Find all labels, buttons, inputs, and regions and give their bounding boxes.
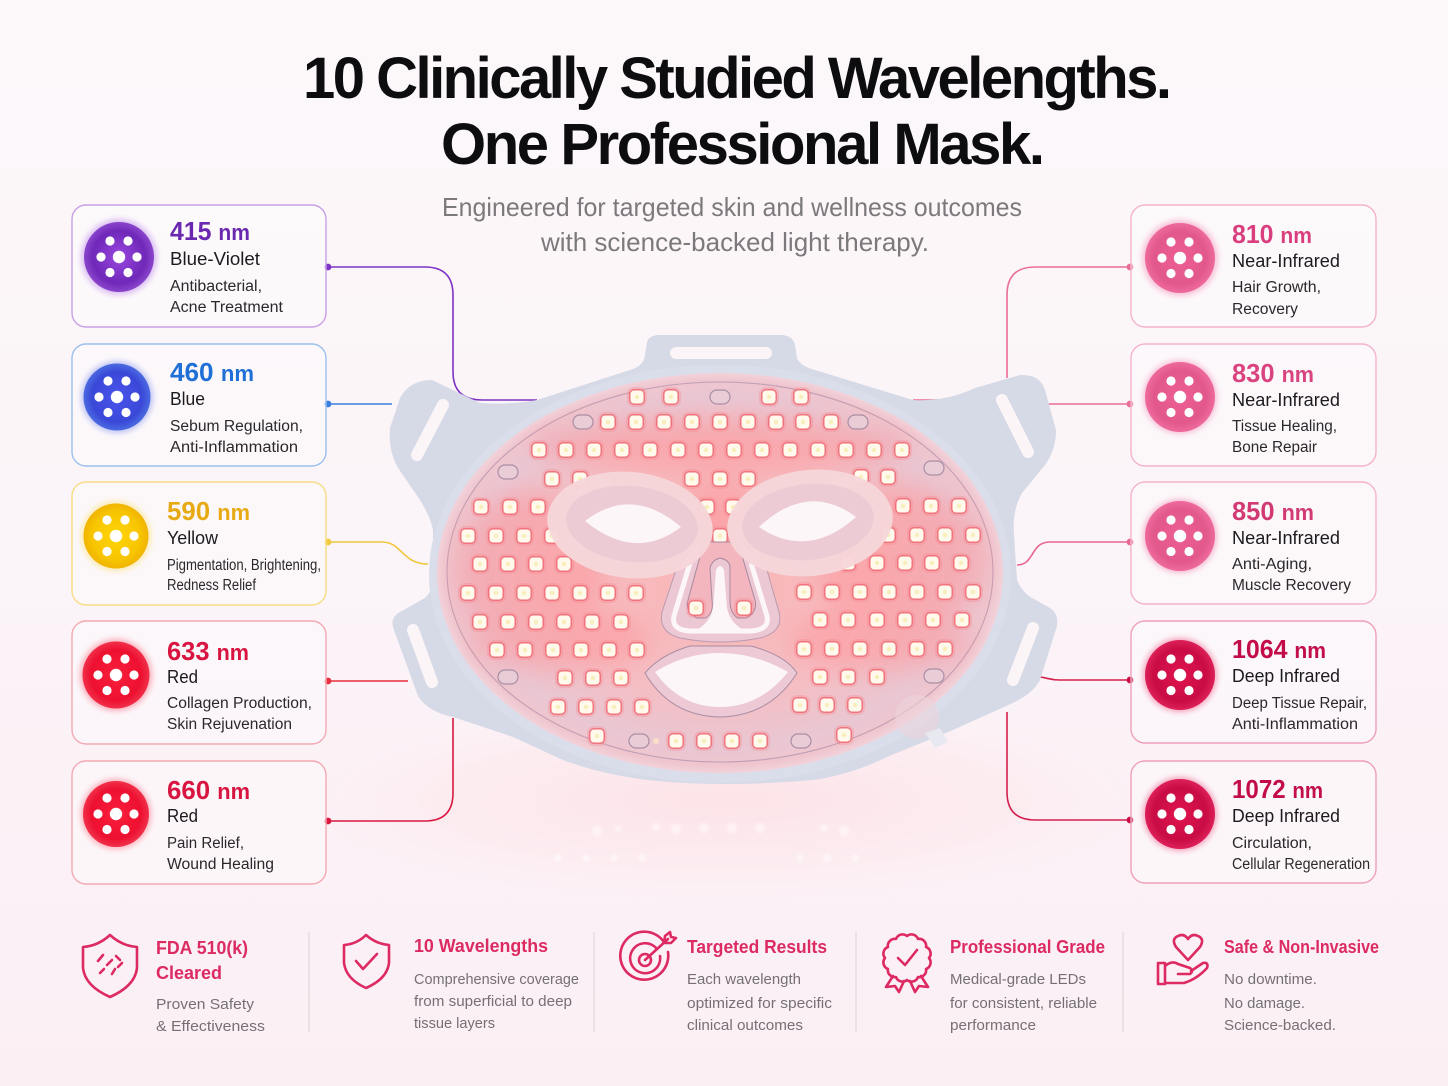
name: Deep Infrared bbox=[1232, 806, 1340, 826]
icon: pink led bbox=[1143, 360, 1217, 434]
description: No damage. bbox=[1224, 995, 1305, 1012]
name: Deep Infrared bbox=[1232, 666, 1340, 686]
wavelength: 850 nm bbox=[1232, 496, 1314, 526]
adjustment tab bbox=[895, 695, 948, 748]
description bbox=[950, 971, 1097, 1034]
name: Blue-Violet bbox=[170, 249, 260, 269]
benefits bbox=[1232, 835, 1370, 873]
wavelength: 590 nm bbox=[167, 496, 250, 526]
icon: red led bbox=[80, 639, 152, 711]
name: Near-Infrared bbox=[1232, 390, 1340, 410]
icon: deep red led bbox=[1143, 638, 1217, 712]
benefits bbox=[170, 418, 303, 456]
panel: 850 nm bbox=[1131, 482, 1376, 604]
benefits: Pigmentation, Brightening, bbox=[167, 557, 321, 574]
benefits: Bone Repair bbox=[1232, 439, 1317, 456]
heading: Targeted Results bbox=[687, 937, 827, 957]
strap slots bbox=[413, 353, 1033, 682]
benefits: Acne Treatment bbox=[170, 299, 284, 316]
mask frame bbox=[390, 335, 1057, 784]
rim bbox=[429, 365, 1011, 783]
title: 10 Clinically Studied Wavelengths. bbox=[303, 46, 1172, 111]
benefits: Anti-Inflammation bbox=[170, 439, 298, 456]
feature: targeted results bbox=[620, 932, 833, 1034]
icon: pink led bbox=[1143, 499, 1217, 573]
benefits: Collagen Production, bbox=[167, 695, 312, 712]
title: One Professional Mask. bbox=[441, 112, 1045, 177]
name: Near-Infrared bbox=[1232, 528, 1340, 548]
description: clinical outcomes bbox=[687, 1017, 803, 1034]
description: tissue layers bbox=[414, 1015, 495, 1032]
icon: shield with sparks bbox=[83, 935, 137, 997]
benefits bbox=[170, 278, 284, 316]
benefits: Wound Healing bbox=[167, 856, 274, 873]
panel: 633 nm bbox=[72, 621, 326, 744]
benefits: Recovery bbox=[1232, 301, 1298, 318]
icon: violet led bbox=[81, 219, 157, 295]
icon: deep red led bbox=[1143, 777, 1217, 851]
icon: red led bbox=[81, 779, 151, 849]
description: No downtime. bbox=[1224, 971, 1317, 988]
mask bbox=[390, 335, 1057, 784]
connectors bbox=[325, 264, 1133, 824]
description bbox=[687, 971, 833, 1034]
description: for consistent, reliable bbox=[950, 995, 1097, 1012]
name: Blue bbox=[170, 389, 205, 409]
heading: 10 Wavelengths bbox=[414, 936, 548, 956]
benefits: Anti-Inflammation bbox=[1232, 716, 1358, 733]
benefits bbox=[167, 557, 321, 594]
led array bbox=[458, 387, 983, 751]
benefits: Deep Tissue Repair, bbox=[1232, 695, 1367, 712]
heading: Cleared bbox=[156, 963, 222, 983]
description bbox=[156, 996, 265, 1035]
wavelength: 660 nm bbox=[167, 775, 250, 805]
description: Medical-grade LEDs bbox=[950, 971, 1086, 988]
heading: Safe & Non-Invasive bbox=[1224, 937, 1379, 957]
heading: FDA 510(k) bbox=[156, 938, 248, 958]
icon: target bbox=[620, 932, 676, 980]
benefits: Muscle Recovery bbox=[1232, 577, 1351, 594]
name: Red bbox=[167, 806, 198, 826]
panel: 810 nm bbox=[1131, 205, 1376, 327]
description: Each wavelength bbox=[687, 971, 801, 988]
description: Proven Safety bbox=[156, 996, 255, 1013]
panel: 830 nm bbox=[1131, 344, 1376, 466]
wavelength: 810 nm bbox=[1232, 219, 1312, 249]
wavelength: 830 nm bbox=[1232, 358, 1314, 388]
benefits bbox=[167, 695, 312, 733]
benefits: Sebum Regulation, bbox=[170, 418, 303, 435]
benefits: Tissue Healing, bbox=[1232, 418, 1337, 435]
heading bbox=[156, 938, 248, 983]
benefits bbox=[1232, 418, 1337, 456]
floor glow bbox=[285, 700, 1165, 900]
panel: 590 nm bbox=[72, 482, 326, 605]
subtitle bbox=[442, 192, 1022, 257]
feature: professional grade bbox=[883, 934, 1105, 1034]
wavelength: 460 nm bbox=[170, 357, 254, 387]
description: & Effectiveness bbox=[156, 1018, 265, 1035]
inner contour bbox=[447, 382, 993, 762]
benefits: Pain Relief, bbox=[167, 835, 244, 852]
description bbox=[414, 971, 579, 1032]
wavelength: 415 nm bbox=[170, 216, 250, 246]
left eye ring bbox=[542, 464, 718, 586]
heading: Professional Grade bbox=[950, 937, 1105, 957]
feature: 10 wavelengths bbox=[344, 935, 579, 1032]
subtitle: Engineered for targeted skin and wellness outcomes bbox=[442, 192, 1022, 222]
right eye ring bbox=[722, 462, 898, 584]
benefits bbox=[1232, 556, 1351, 594]
benefits: Redness Relief bbox=[167, 577, 257, 594]
description: Comprehensive coverage bbox=[414, 971, 579, 988]
icon: heart in hand bbox=[1158, 935, 1208, 984]
icon: award rosette bbox=[883, 934, 931, 992]
description: from superficial to deep bbox=[414, 993, 572, 1010]
description: Science-backed. bbox=[1224, 1017, 1336, 1034]
wavelength: 633 nm bbox=[167, 636, 249, 666]
benefits: Anti-Aging, bbox=[1232, 556, 1312, 573]
wavelength: 1072 nm bbox=[1232, 774, 1323, 804]
subtitle: with science-backed light therapy. bbox=[540, 227, 929, 257]
benefits: Circulation, bbox=[1232, 835, 1312, 852]
name: Near-Infrared bbox=[1232, 251, 1340, 271]
red glow bbox=[455, 417, 985, 670]
panel: 415 nm bbox=[72, 205, 326, 327]
panel: 1064 nm bbox=[1131, 621, 1376, 743]
icon: blue led bbox=[81, 361, 153, 433]
title bbox=[303, 46, 1172, 177]
icon: pink led bbox=[1142, 220, 1218, 296]
benefits: Cellular Regeneration bbox=[1232, 856, 1370, 873]
wavelength: 1064 nm bbox=[1232, 634, 1326, 664]
indicator ovals bbox=[498, 390, 944, 748]
benefits: Antibacterial, bbox=[170, 278, 262, 295]
feature: FDA cleared bbox=[83, 935, 265, 1035]
feature: safe and non-invasive bbox=[1158, 935, 1379, 1034]
icon: yellow led bbox=[81, 501, 151, 571]
benefits bbox=[1232, 695, 1367, 733]
name: Yellow bbox=[167, 528, 219, 548]
description: performance bbox=[950, 1017, 1036, 1034]
description: optimized for specific bbox=[687, 995, 833, 1012]
panel: 1072 nm bbox=[1131, 761, 1376, 883]
benefits bbox=[167, 835, 274, 873]
name: Red bbox=[167, 667, 198, 687]
benefits bbox=[1232, 279, 1321, 318]
nose opening bbox=[661, 542, 780, 642]
benefits: Skin Rejuvenation bbox=[167, 716, 292, 733]
reflection bbox=[554, 823, 859, 862]
description bbox=[1224, 971, 1336, 1034]
mouth opening bbox=[645, 646, 797, 717]
panel: 660 nm bbox=[72, 761, 326, 884]
icon: shield check bbox=[344, 935, 389, 988]
panel: 460 nm bbox=[72, 344, 326, 466]
benefits: Hair Growth, bbox=[1232, 279, 1321, 296]
